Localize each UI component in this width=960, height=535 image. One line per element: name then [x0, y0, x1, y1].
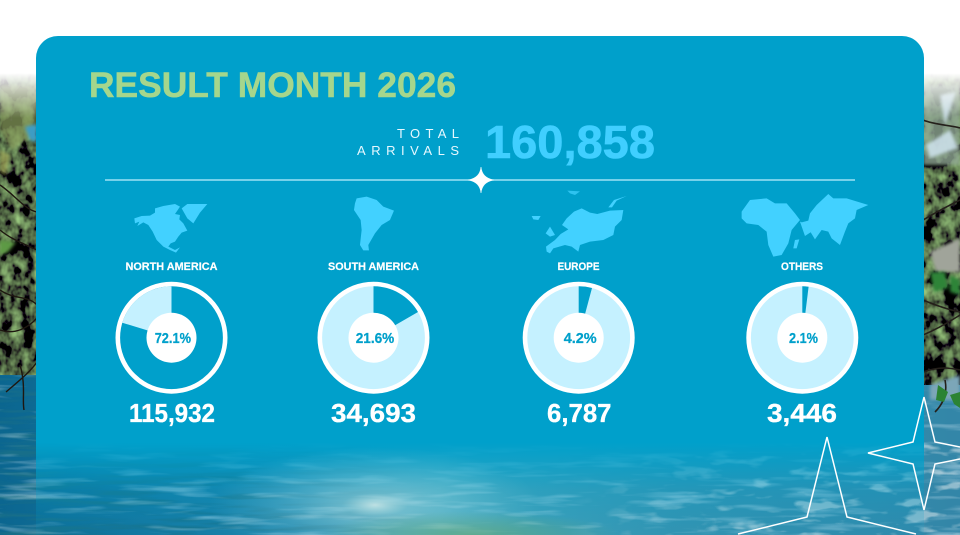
large outlined star	[738, 437, 916, 534]
label: South America: SOUTH AMERICA	[328, 261, 419, 273]
label: North America: NORTH AMERICA	[126, 261, 218, 273]
donut chart: 21.6%	[320, 284, 427, 391]
divider with sparkle	[105, 167, 855, 193]
donut chart: 72.1%	[118, 284, 225, 391]
value: South America: 34,693	[331, 398, 416, 428]
total arrivals label: TOTAL	[397, 126, 459, 141]
donut chart: 72.1%: 72.1%	[155, 330, 191, 347]
donut chart: 21.6%: 21.6%	[356, 330, 394, 347]
background photo: right mangrove	[923, 70, 960, 412]
background photo: water	[0, 370, 960, 535]
label: Europe: EUROPE	[558, 261, 600, 273]
total arrivals label	[357, 126, 459, 158]
small outlined star	[868, 397, 960, 510]
white top fade	[0, 0, 960, 118]
value: North America: 115,932	[129, 398, 215, 428]
title: RESULT MONTH 2026	[89, 66, 456, 105]
map: Europe	[532, 191, 627, 253]
map: South America	[354, 197, 394, 250]
total arrivals label: ARRIVALS	[357, 143, 459, 158]
value: Others: 3,446	[767, 398, 837, 428]
donut chart: 4.2%: 4.2%	[564, 330, 597, 347]
column: Europe	[525, 191, 632, 428]
map: North America	[134, 204, 207, 253]
total arrivals number: 160,858	[485, 116, 655, 168]
value: Europe: 6,787	[547, 398, 612, 428]
column: Others	[742, 194, 868, 428]
column: North America	[118, 204, 225, 428]
background photo: left mangrove	[0, 70, 37, 410]
donut chart: 2.1%	[749, 284, 856, 391]
label: Others: OTHERS	[781, 261, 823, 273]
donut chart: 2.1%: 2.1%	[789, 330, 818, 347]
column: South America	[320, 197, 427, 428]
donut chart: 4.2%	[525, 284, 632, 391]
map: Africa and Asia	[742, 194, 868, 257]
